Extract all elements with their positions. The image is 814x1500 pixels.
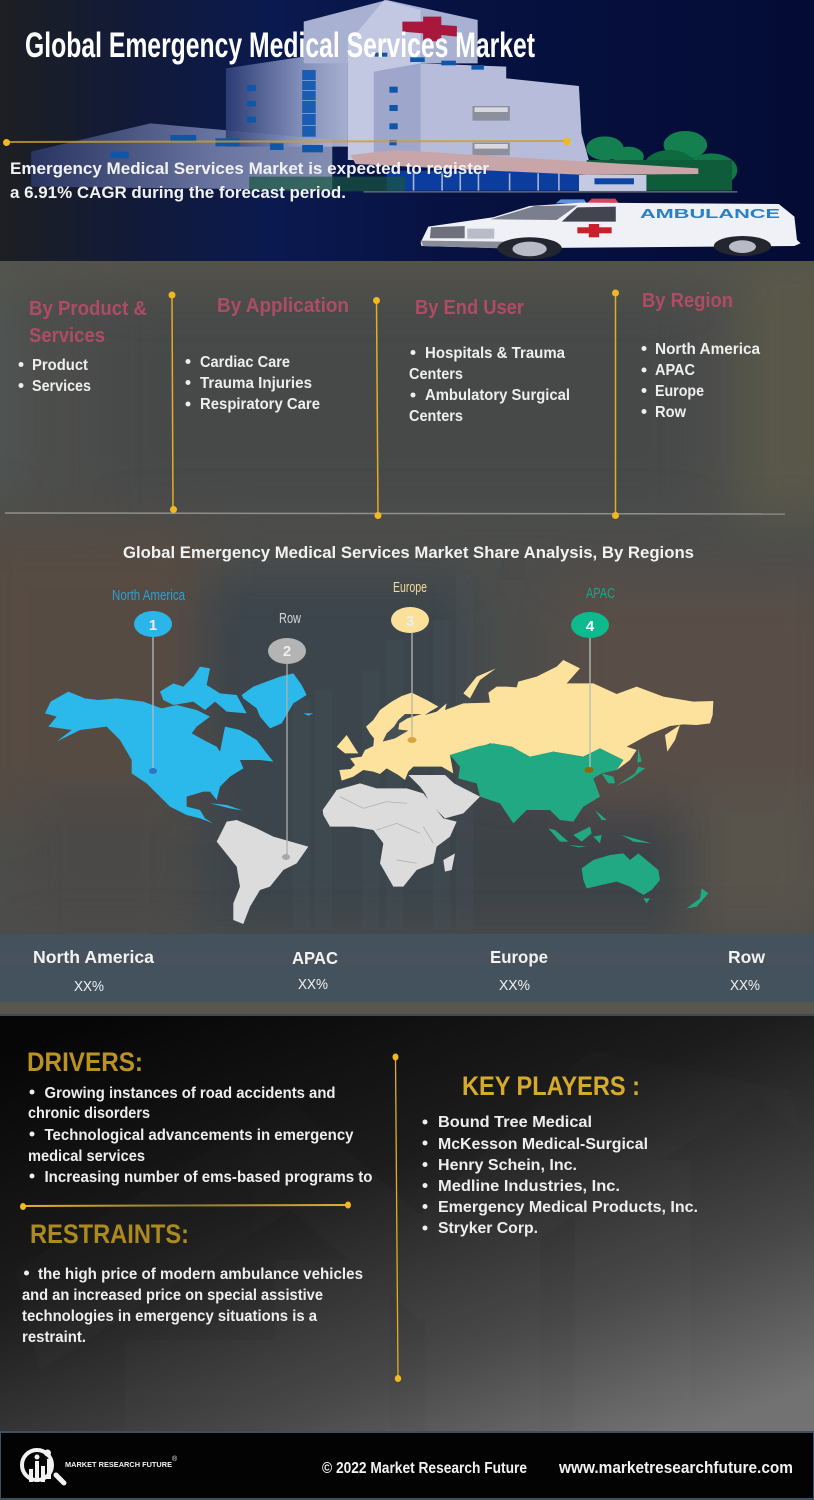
panel: key players: McKesson Medical-Surgical [438,1136,648,1153]
callout: europe: Europe [393,579,427,596]
stat: north america: North America [33,947,154,967]
panel: header [0,0,814,261]
map: north america [45,667,313,823]
stat: europe: Europe [490,947,548,967]
stat: row: XX% [730,977,760,994]
panel: key players: Henry Schein, Inc. [438,1157,577,1174]
panel: regional share band [0,934,814,1015]
divider: drivers gold line [20,1202,351,1210]
panel: restraints: technologies in emergency situations is a [22,1308,317,1325]
title: Global Emergency Medical Services Market [25,26,535,65]
callout: north america: North America [112,587,185,604]
panel: drivers: chronic disorders [28,1105,150,1122]
panel: drivers: Growing instances of road accidents and [44,1085,336,1102]
panel: by region [642,290,760,421]
map: asia pacific [450,743,708,908]
panel: key players: Bound Tree Medical [438,1114,592,1131]
panel: drivers: medical services [28,1148,145,1165]
subtitle: a 6.91% CAGR during the forecast period. [10,183,346,202]
divider: key players gold line [392,1054,401,1382]
stat: apac: APAC [292,948,338,968]
stat: north america: XX% [74,978,104,995]
illustration: ambulance [421,199,801,259]
callout: apac: 4 [586,618,595,635]
panel: key players [422,1071,698,1237]
stat: north america [33,947,154,995]
map: south america, africa and middle east [217,775,480,924]
panel: by region: APAC [655,362,695,379]
panel: by region: Row [655,404,687,421]
panel: by end user: By End User [415,297,524,319]
panel: restraints: restraint. [22,1329,86,1346]
callout: row: Row [279,610,301,627]
panel: by application: Trauma Injuries [200,375,312,392]
callout: apac [571,585,615,773]
panel: by end user: Centers [409,408,463,425]
callout: row: 2 [283,643,291,660]
panel: by region: North America [655,341,760,358]
panel: by application: Cardiac Care [200,354,290,371]
stat: apac: XX% [298,976,328,993]
callout: apac: APAC [586,585,615,602]
text: brand name [65,1455,178,1469]
panel: by end user: Centers [409,366,463,383]
icon: market research future logo [22,1450,64,1483]
heading: market share analysis: Global Emergency Medical Services Market Share Analysis, By Regions [123,544,694,562]
panel: by end user [409,297,570,425]
panel: by end user: Ambulatory Surgical [425,387,570,404]
stat: row [728,947,765,994]
stat: europe [490,947,548,994]
panel: by application: By Application [217,295,349,317]
map: europe and russia [337,660,713,781]
panel: footer [0,1431,814,1500]
panel: by application [186,295,349,413]
callout: europe: 3 [406,613,414,630]
panel: key players: KEY PLAYERS : [462,1071,640,1101]
panel: segments and map background [0,261,814,934]
panel: key players: Medline Industries, Inc. [438,1178,620,1195]
panel: drivers, restraints and key players background [0,1014,814,1433]
panel: key players: Emergency Medical Products, Inc. [438,1199,698,1216]
text: brand name: MARKET RESEARCH FUTURE [65,1460,172,1469]
panel: by end user: Hospitals & Trauma [425,345,565,362]
stat: europe: XX% [499,977,530,994]
callout: north america: 1 [149,617,157,634]
callout: row [268,610,306,860]
panel: by product and services: Services [32,378,91,395]
dividers: segment gold lines [5,290,785,519]
panel: by region: Europe [655,383,704,400]
panel: drivers [27,1047,373,1186]
callout: europe [391,579,429,743]
panel: by product and services: By Product & [29,298,147,320]
stat: apac [292,948,338,993]
panel: restraints [22,1219,363,1346]
panel: restraints: RESTRAINTS: [30,1219,189,1249]
subtitle: Emergency Medical Services Market is expected to register [10,159,489,178]
divider: header gold line [3,138,570,146]
text: copyright: © 2022 Market Research Future [322,1460,527,1477]
text: brand name: ® [172,1455,178,1463]
panel: drivers: DRIVERS: [27,1047,143,1077]
panel: drivers: Technological advancements in emergency [44,1127,354,1144]
panel: restraints: the high price of modern ambulance vehicles [38,1266,363,1283]
panel: by region: By Region [642,290,733,312]
text: website: www.marketresearchfuture.com [558,1459,793,1477]
stat: row: Row [728,947,765,967]
panel: by product and services: Product [32,357,89,374]
illustration: ambulance: AMBULANCE [640,207,780,221]
subtitle [10,159,489,202]
panel: by application: Respiratory Care [200,396,320,413]
panel: by product and services: Services [29,325,105,347]
chart: world map by region [45,579,713,924]
panel: by product and services [18,298,147,395]
panel: key players: Stryker Corp. [438,1220,538,1237]
callout: north america [112,587,185,774]
illustration: hospital building [31,0,737,193]
panel: drivers: Increasing number of ems-based programs to [44,1169,373,1186]
panel: restraints: and an increased price on special assistive [22,1287,323,1304]
